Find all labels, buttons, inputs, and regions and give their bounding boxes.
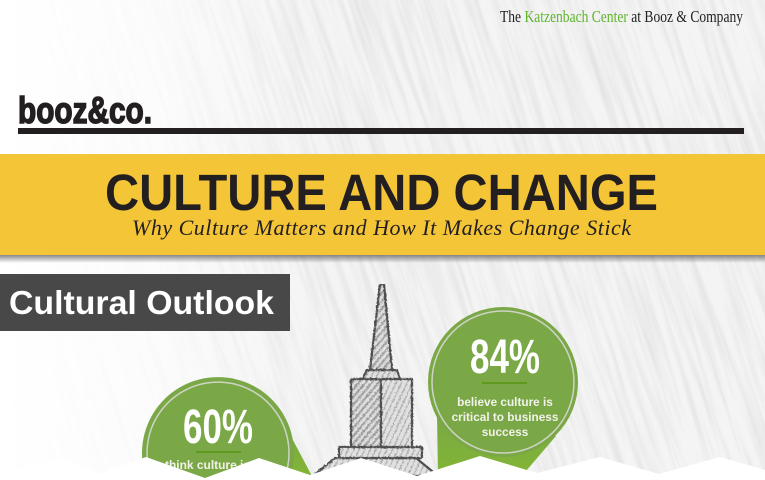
subtitle: Why Culture Matters and How It Makes Change Stick <box>132 215 632 240</box>
section heading: Cultural Outlook <box>0 274 290 331</box>
logo: booz&co.: booz&co. <box>18 90 152 131</box>
callout: 84% <box>428 307 578 478</box>
torn paper bottom edge <box>0 456 765 480</box>
callout: 84%: 84% <box>470 331 540 384</box>
callout: 84%: critical to business <box>452 410 559 424</box>
black header rule <box>18 128 744 134</box>
header credit: The Katzenbach Center at Booz & Company: The Katzenbach Center at Booz & Company <box>500 7 744 26</box>
section heading: Cultural Outlook: Cultural Outlook <box>9 284 275 321</box>
callout: 84%: believe culture is <box>457 395 553 409</box>
illustration: sketched tower <box>313 284 438 476</box>
callout: 60%: think culture is <box>165 458 250 472</box>
yellow title banner <box>0 154 765 263</box>
callout: 84%: success <box>482 425 529 439</box>
title: CULTURE AND CHANGE <box>105 164 658 221</box>
callout: 60%: 60% <box>183 401 253 454</box>
callout: 60% <box>142 377 313 478</box>
